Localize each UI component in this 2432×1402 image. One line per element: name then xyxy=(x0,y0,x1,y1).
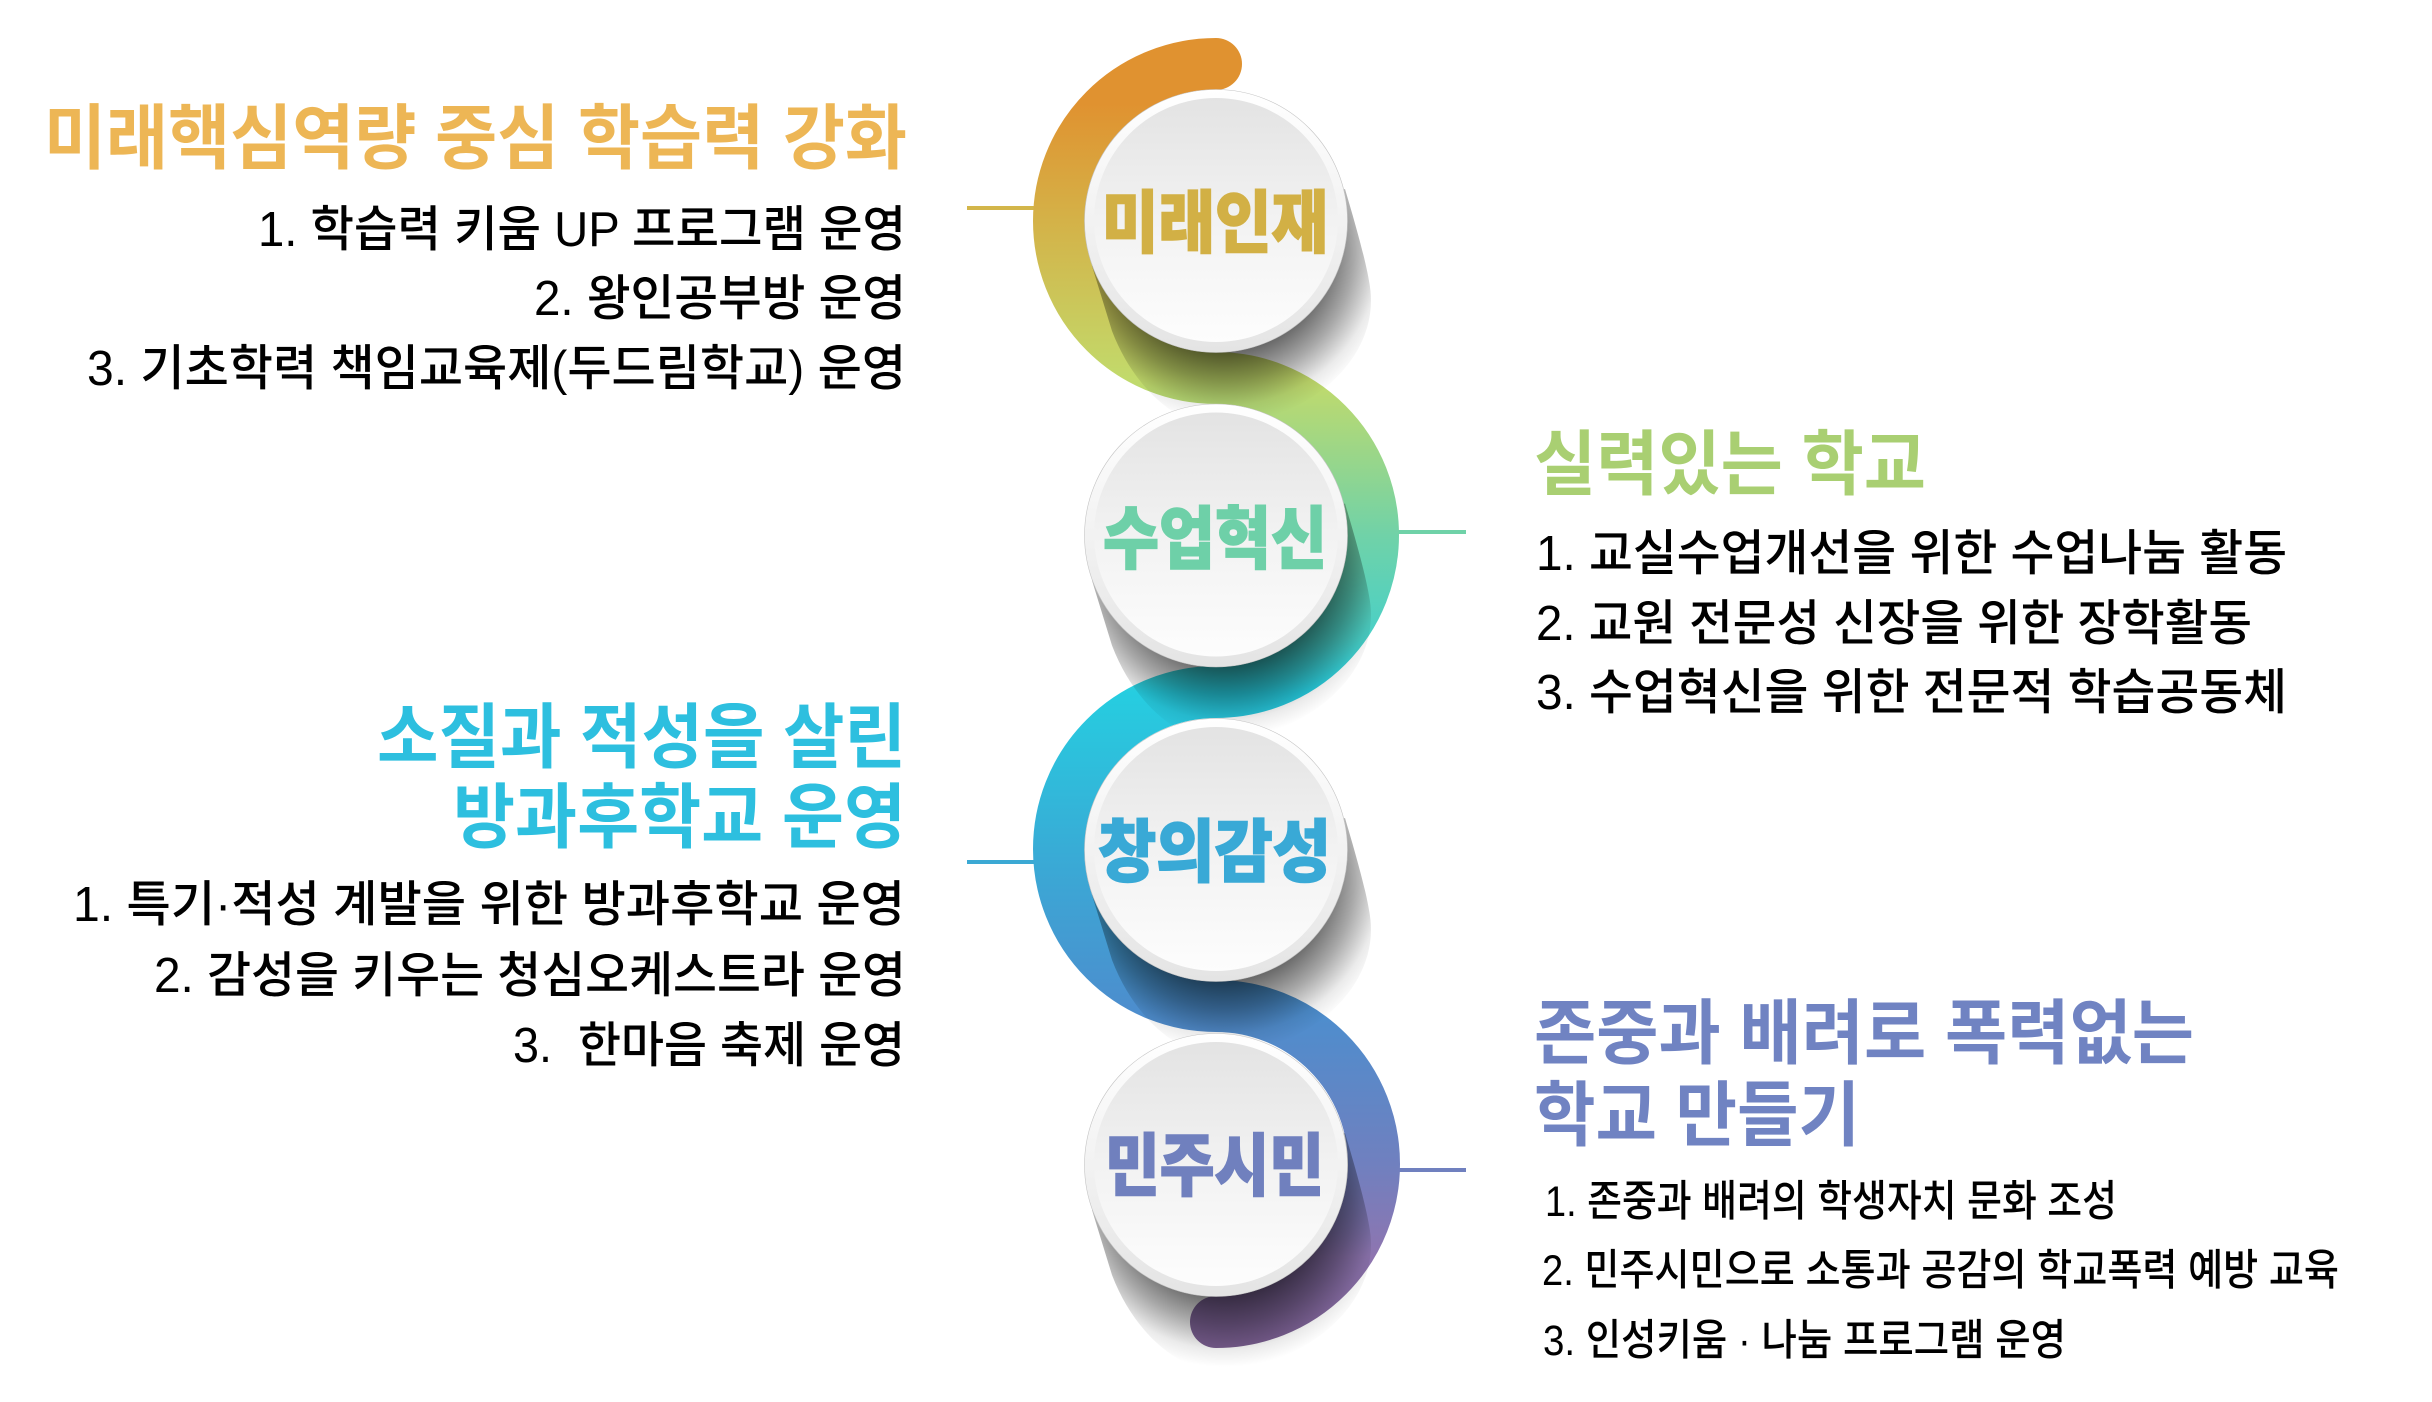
shadow: circle 4 xyxy=(1092,1133,1371,1370)
circle badge: 창의감성 xyxy=(1084,718,1348,982)
text block: 수업혁신 items: 2. 교원 전문성 신장을 위한 장학활동 xyxy=(1536,597,2252,651)
shadow: circle 3 xyxy=(1092,818,1371,1055)
panel: heading block 미래인재 xyxy=(44,100,907,396)
text block: 창의감성 items: 2. 감성을 키우는 청심오케스트라 운영 xyxy=(154,949,906,1003)
circle badge: 미래인재 xyxy=(1084,90,1348,352)
text block: 창의감성 items xyxy=(73,878,906,1073)
text block: 민주시민 items: 1. 존중과 배려의 학생자치 문화 조성 xyxy=(1545,1178,2117,1226)
circle badge: 민주시민 xyxy=(1084,1034,1348,1296)
ribbon: S-curve xyxy=(1059,64,1374,1322)
text block: 미래인재 items xyxy=(87,203,906,396)
circle badge: 민주시민: 민주시민 xyxy=(1105,1129,1324,1205)
circle badge: 미래인재: 미래인재 xyxy=(1102,186,1328,262)
text block: 민주시민 items: 2. 민주시민으로 소통과 공감의 학교폭력 예방 교육 xyxy=(1542,1247,2339,1295)
text block: 미래인재 items: 3. 기초학력 책임교육제(두드림학교) 운영 xyxy=(87,342,906,396)
text block: 수업혁신 items: 3. 수업혁신을 위한 전문적 학습공동체 xyxy=(1536,666,2287,720)
heading: 소질과 적성: 소질과 적성을 살린 xyxy=(377,699,906,778)
heading: 미래핵심역량: 미래핵심역량 중심 학습력 강화 xyxy=(44,100,907,179)
connector: 창의감성 xyxy=(967,860,1037,864)
heading: 소질과 적성 xyxy=(377,699,906,858)
text block: 수업혁신 items xyxy=(1536,527,2287,720)
text block: 민주시민 items xyxy=(1542,1178,2339,1365)
heading: 실력있는 학교: 실력있는 학교 xyxy=(1534,426,1926,505)
circle badge: 수업혁신: 수업혁신 xyxy=(1103,502,1327,578)
heading: 존중과 배려 xyxy=(1534,995,2194,1156)
text block: 미래인재 items: 2. 왕인공부방 운영 xyxy=(534,272,906,326)
text block: 수업혁신 items: 1. 교실수업개선을 위한 수업나눔 활동 xyxy=(1536,527,2287,581)
text block: 민주시민 items: 3. 인성키움 · 나눔 프로그램 운영 xyxy=(1543,1317,2066,1365)
text block: 미래인재 items: 1. 학습력 키움 UP 프로그램 운영 xyxy=(258,203,906,257)
connector: 수업혁신 xyxy=(1396,530,1466,534)
circle badge: 창의감성: 창의감성 xyxy=(1098,815,1331,891)
shadow: circle 2 xyxy=(1092,504,1371,740)
panel: heading block 민주시민 xyxy=(1534,995,2339,1365)
connector: 민주시민 xyxy=(1396,1168,1466,1172)
panel: heading block 창의감성 xyxy=(73,699,906,1073)
text block: 창의감성 items: 1. 특기·적성 계발을 위한 방과후학교 운영 xyxy=(73,878,905,932)
shadow: circle 1 xyxy=(1092,189,1371,426)
connector: 미래인재 xyxy=(967,206,1037,210)
circle badge: 수업혁신 xyxy=(1084,404,1348,667)
panel: heading block 수업혁신 xyxy=(1534,426,2287,720)
heading: 소질과 적성: 방과후학교 운영 xyxy=(453,779,906,858)
heading: 존중과 배려: 학교 만들기 xyxy=(1534,1077,1860,1156)
text block: 창의감성 items: 3. 한마음 축제 운영 xyxy=(513,1019,905,1073)
heading: 존중과 배려: 존중과 배려로 폭력없는 xyxy=(1534,995,2194,1074)
